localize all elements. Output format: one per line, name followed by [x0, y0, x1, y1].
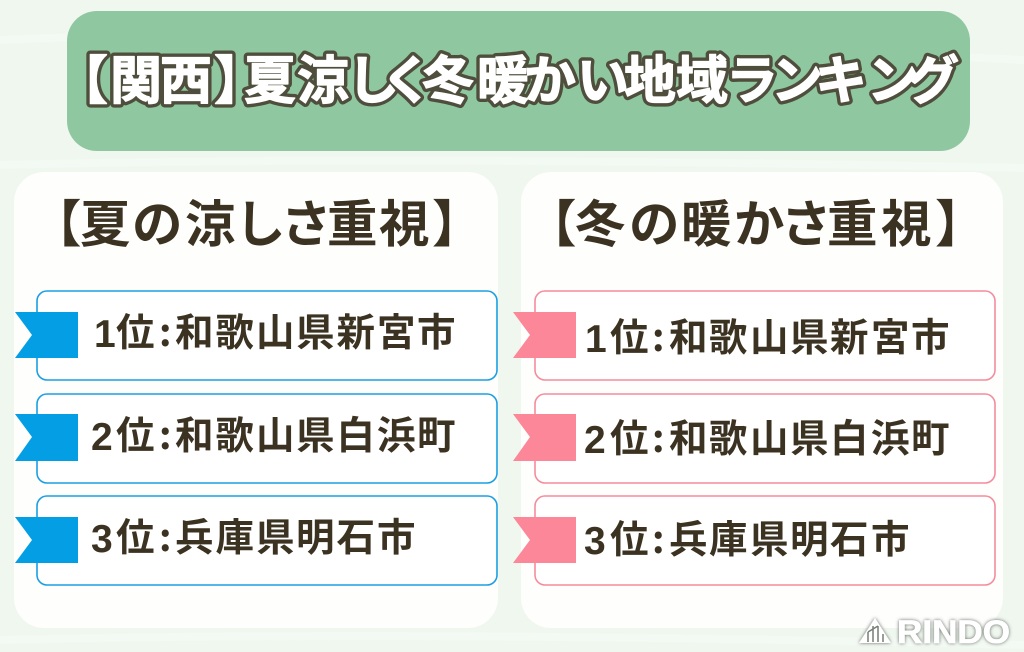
rank 2 summer: 2 — [91, 416, 113, 459]
heading: winter: 【冬の暖かさ重視】 — [526, 183, 986, 257]
logo: RINDO: RINDO — [897, 614, 1010, 650]
panel: winter warmth — [513, 172, 1003, 628]
rank 1 winter: 1 — [585, 318, 607, 361]
rank 2 winter: 2 — [584, 419, 606, 462]
rank 1 winter — [513, 291, 995, 380]
rank 3 winter: 3 — [584, 520, 606, 563]
logo: RINDO — [859, 614, 1010, 650]
title banner — [56, 11, 970, 151]
rank 2 summer: 位:和歌山県白浜町 — [116, 405, 456, 461]
title outline: 【関西】夏涼しく冬暖かい地域ランキング — [56, 39, 959, 114]
rank 1 summer: 1 — [94, 313, 116, 356]
rank 2 winter — [513, 394, 995, 483]
rank 3 winter: 位:兵庫県明石市 — [610, 509, 910, 565]
rank 3 summer: 位:兵庫県明石市 — [116, 507, 416, 563]
icon: mountain — [859, 618, 891, 643]
rank 1 summer: 位:和歌山県新宮市 — [116, 302, 456, 358]
panel: summer coolness — [14, 172, 498, 628]
rank 1 summer — [15, 291, 497, 380]
rank 3 winter — [513, 496, 995, 585]
rank 2 summer — [15, 394, 497, 483]
rank 1 winter: 位:和歌山県新宮市 — [610, 307, 950, 363]
rank 3 summer: 3 — [91, 518, 113, 561]
rank 3 summer — [15, 496, 497, 585]
title: 【関西】夏涼しく冬暖かい地域ランキング — [56, 39, 959, 114]
rank 2 winter: 位:和歌山県白浜町 — [610, 408, 950, 464]
heading: summer: 【夏の涼しさ重視】 — [31, 183, 482, 257]
